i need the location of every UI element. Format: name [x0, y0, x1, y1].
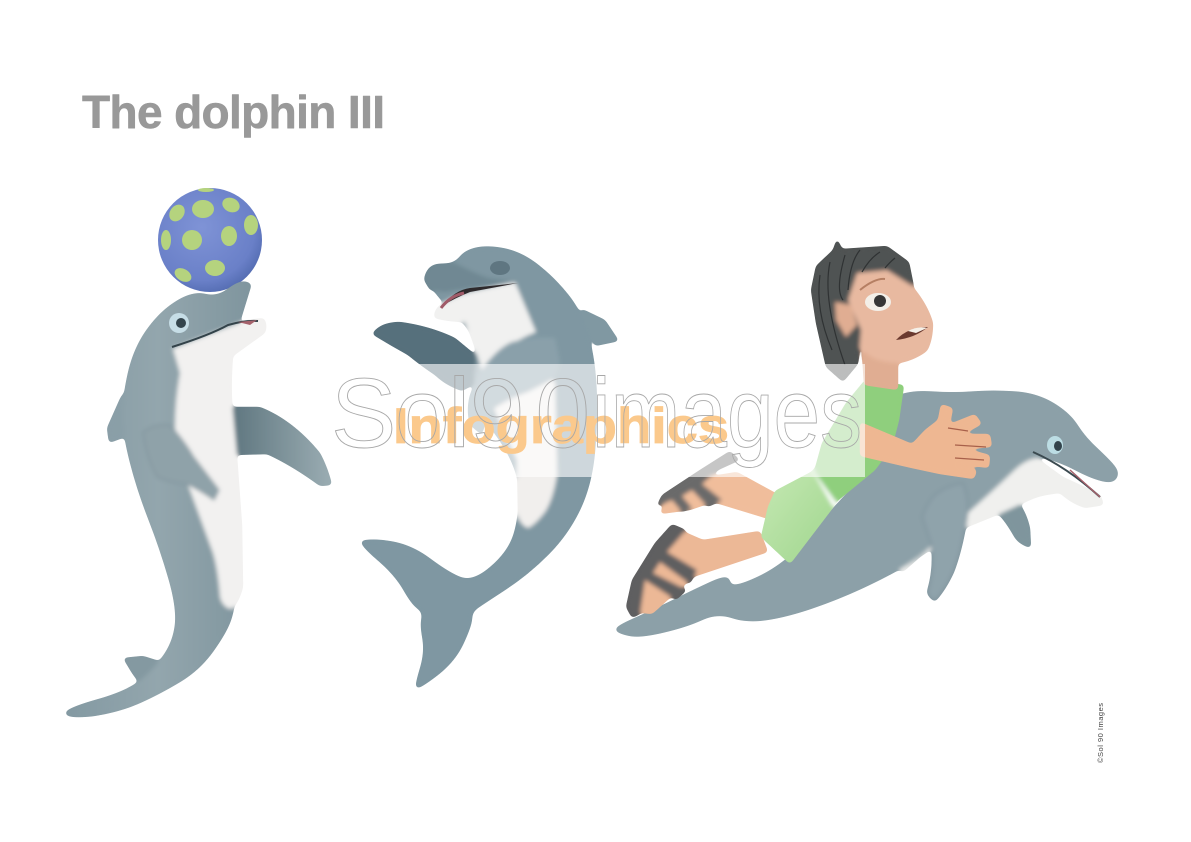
arm and hand	[860, 404, 992, 479]
boy figure	[626, 238, 992, 618]
watermark: Sol 90 images: 90	[470, 358, 590, 468]
dolphin face	[1033, 436, 1100, 497]
face	[860, 279, 928, 340]
dolphin body	[615, 391, 1118, 637]
watermark: Sol 90 images: images	[592, 358, 862, 468]
dolphin body	[65, 281, 332, 717]
finger lines	[948, 428, 986, 460]
credit: ©Sol 90 Images	[1096, 703, 1105, 763]
dolphin body	[361, 246, 619, 688]
watermark: Sol 90 images: Sol	[331, 358, 470, 468]
watermark band	[335, 364, 865, 477]
shorts and shirt	[761, 380, 904, 564]
neck and head	[811, 238, 933, 390]
legs and sandals	[626, 451, 779, 618]
dolphin with ball	[65, 188, 332, 717]
mouth and eye	[169, 313, 258, 347]
label: Infographics: Infographics	[393, 398, 729, 454]
dolphin leaping	[361, 246, 619, 688]
hair strands	[819, 250, 895, 365]
mouth and eye	[441, 261, 518, 308]
boy riding dolphin	[615, 238, 1118, 637]
watermark: Sol 90 images	[331, 358, 862, 468]
title: The dolphin III	[82, 86, 385, 138]
icon: spotted ball	[158, 188, 262, 292]
